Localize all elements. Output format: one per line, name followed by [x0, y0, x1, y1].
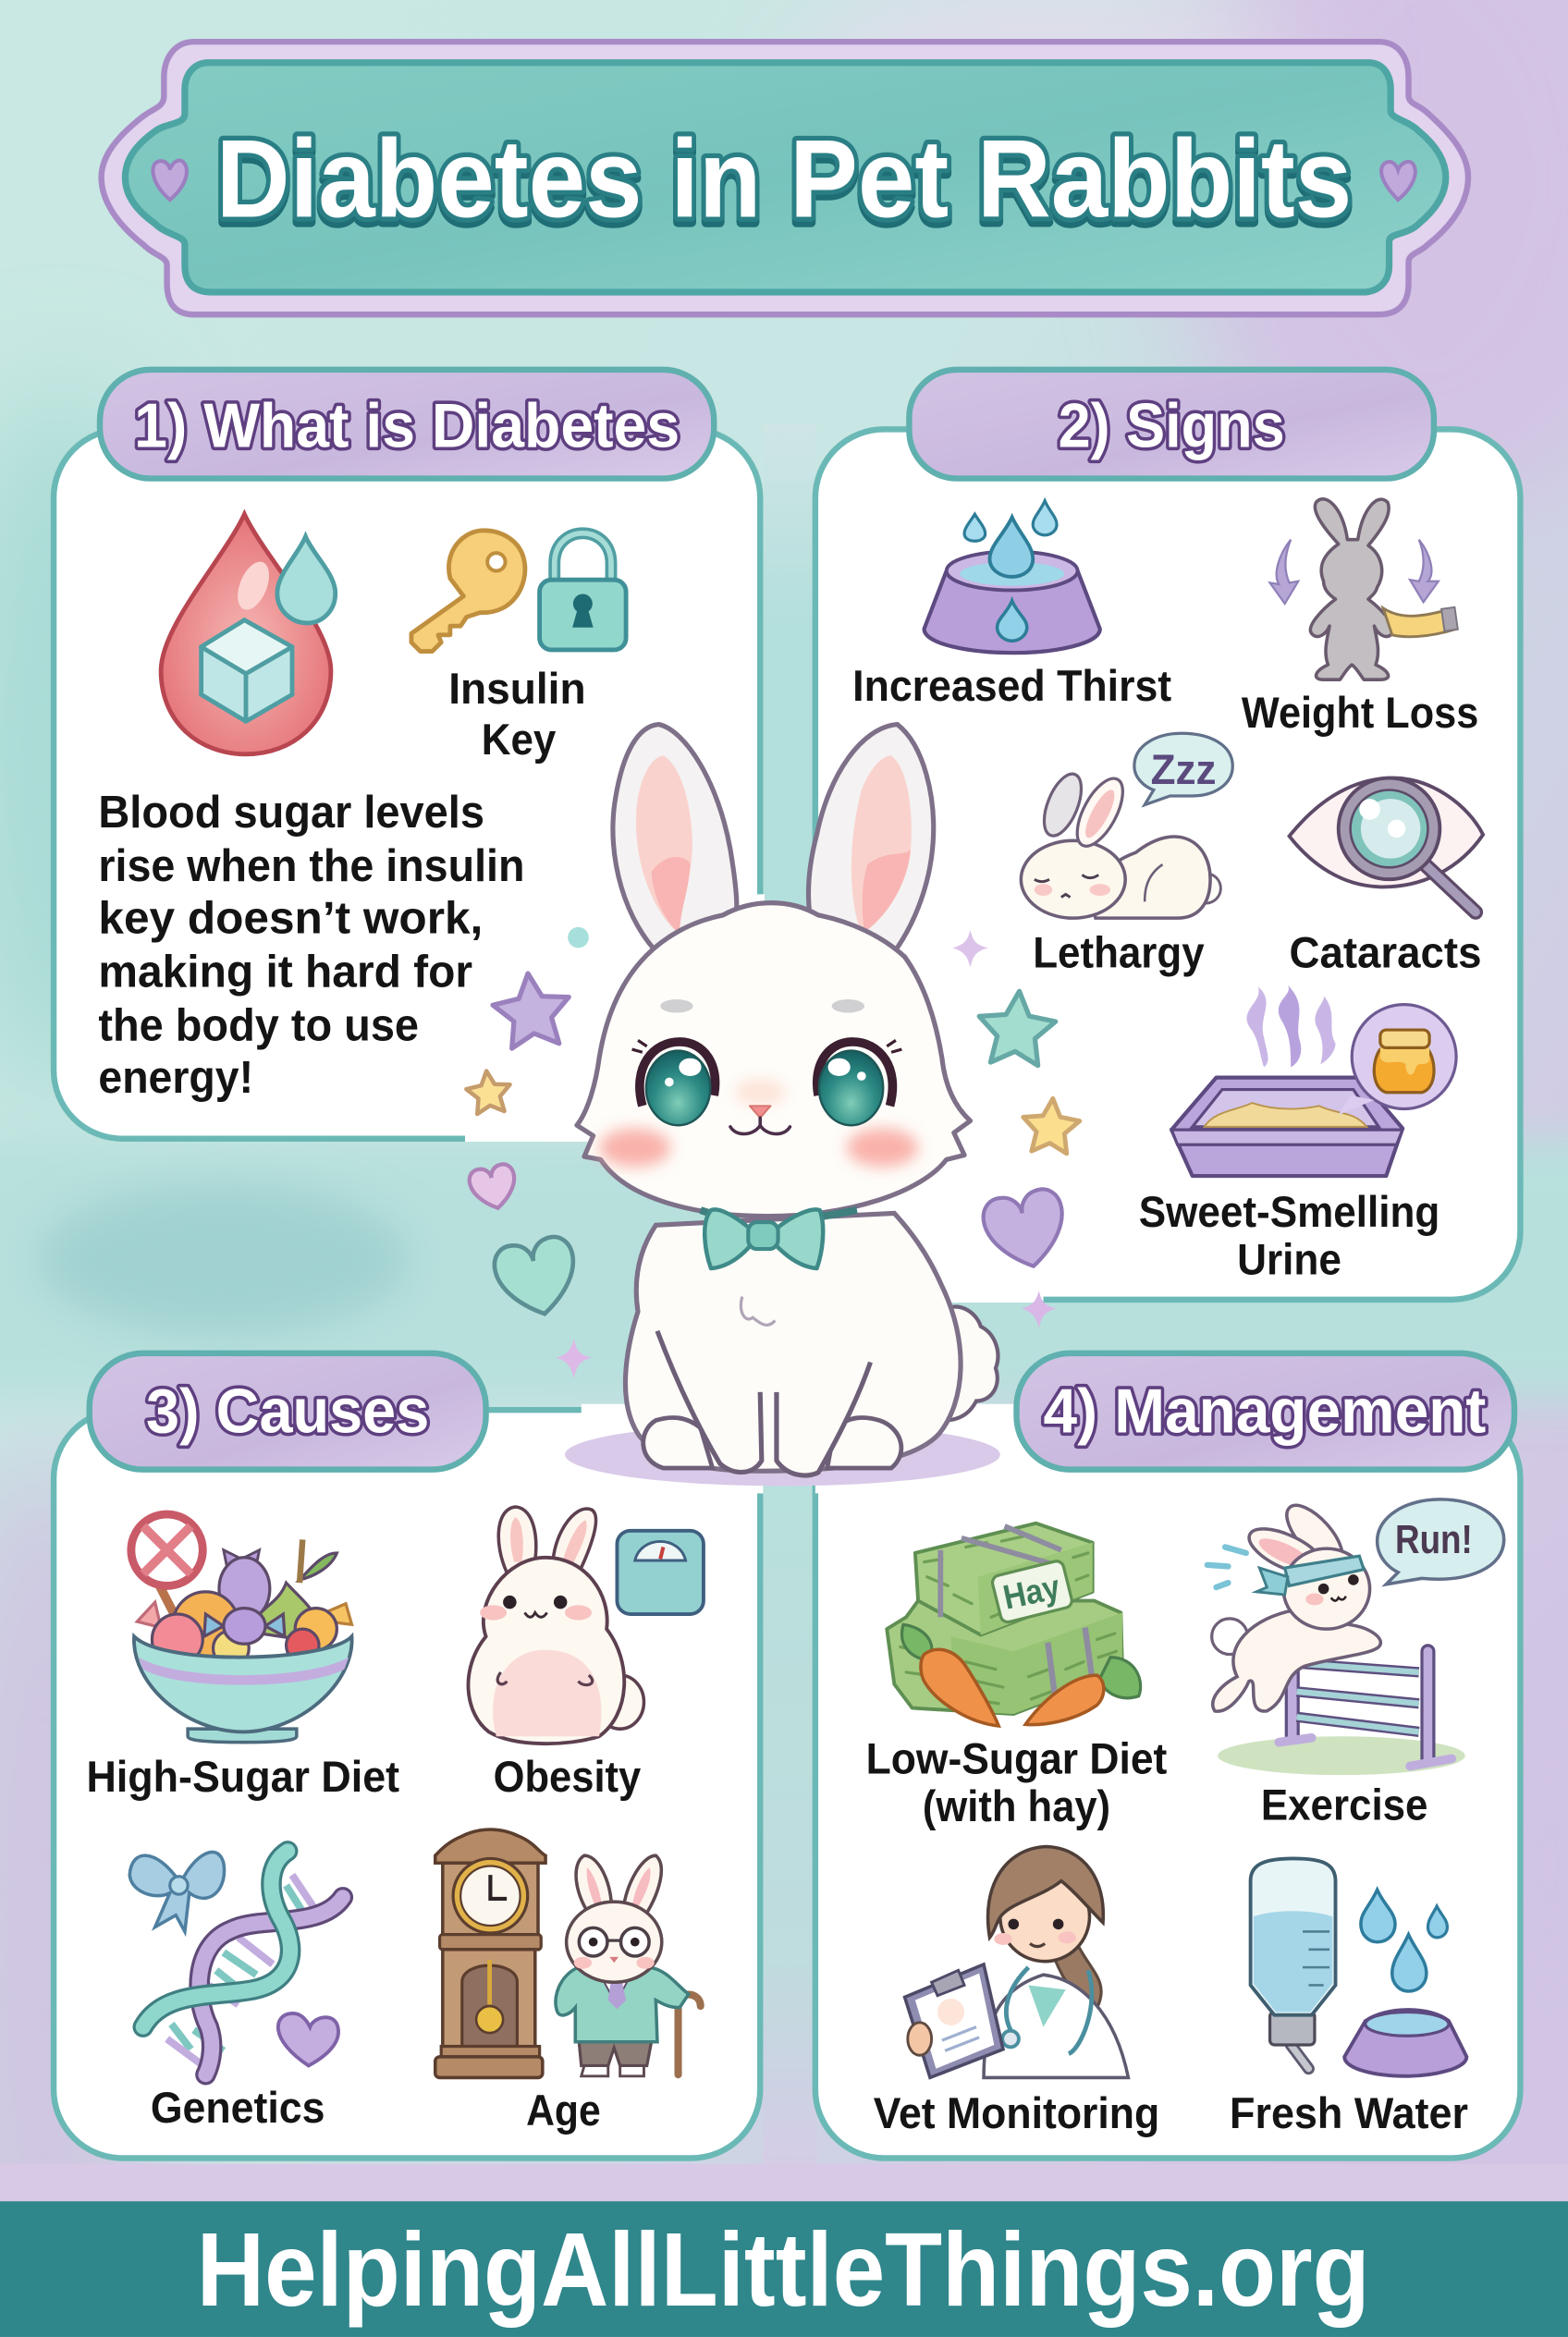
- icon: candy and fruit bowl: [131, 1514, 352, 1743]
- rabbit back feet: [643, 1417, 901, 1468]
- text: high-sugar diet: High-Sugar Diet: [87, 1753, 399, 1802]
- heading: management: [1016, 1353, 1514, 1470]
- text: exercise: Exercise: [1261, 1781, 1427, 1830]
- text: fresh water: Fresh Water: [1230, 2089, 1468, 2138]
- text: what is diabetes description: rise when the insulin: [98, 840, 524, 891]
- decoration: sparkle left: [556, 1339, 592, 1378]
- decoration: teal heart: [491, 1233, 583, 1322]
- heading: causes: 3) Causes: [146, 1377, 429, 1446]
- heading: signs: 2) Signs: [1059, 392, 1285, 461]
- text: insulin key label: [448, 665, 586, 765]
- text: lethargy: Lethargy: [1033, 928, 1205, 977]
- icon: litter box with honey: [1171, 985, 1456, 1176]
- text: obesity: Obesity: [494, 1753, 642, 1802]
- footer band: HelpingAllLittleThings.org: [197, 2211, 1370, 2328]
- panel edge softening: [465, 894, 1044, 1493]
- decoration: sparkle: [952, 930, 988, 967]
- text: what is diabetes description: the body to use: [98, 999, 419, 1050]
- icon: obese rabbit with scale: [468, 1507, 704, 1744]
- icon: water bottle and bowl: [1251, 1858, 1466, 2076]
- icon: hay bales and carrots: [887, 1523, 1141, 1726]
- text: sweet-smelling urine: [1139, 1188, 1439, 1284]
- decoration: sparkle right: [1021, 1291, 1057, 1328]
- decoration: purple heart: [980, 1186, 1072, 1275]
- heading: management: 4) Management: [1044, 1377, 1486, 1446]
- icon: sleeping rabbit: [1021, 733, 1232, 918]
- decoration: teal dot: [568, 927, 589, 948]
- icon: blood drop with sugar cube: [161, 514, 336, 754]
- icon: hay bales and carrots: Hay: [999, 1567, 1063, 1617]
- panel: management: [815, 1410, 1520, 2158]
- text: low-sugar diet: Low-Sugar Diet: [866, 1735, 1167, 1784]
- text: insulin key label: Insulin: [448, 665, 586, 714]
- heading: causes: [90, 1353, 486, 1470]
- text: what is diabetes description: key doesn’t work,: [98, 892, 483, 943]
- text: genetics: Genetics: [151, 2084, 325, 2133]
- text: weight loss: Weight Loss: [1242, 689, 1478, 738]
- speech text: Run!: Run!: [1395, 1518, 1473, 1562]
- decoration: teal star: [976, 988, 1058, 1067]
- rabbit right eye: [817, 1040, 901, 1125]
- rabbit blush: [599, 1079, 918, 1167]
- text: what is diabetes description: Blood sugar levels: [98, 787, 484, 838]
- icon: vet with clipboard: [905, 1847, 1128, 2077]
- heading: signs: [909, 370, 1434, 479]
- text: what is diabetes description: making it hard for: [98, 946, 472, 997]
- panel: causes: [54, 1410, 760, 2158]
- icon: banner heart right: [1381, 162, 1415, 200]
- decoration: pink heart: [467, 1162, 520, 1213]
- text: low-sugar diet: [866, 1735, 1167, 1831]
- text: what is diabetes description: [98, 787, 524, 1103]
- icon: banner heart left: [153, 161, 187, 200]
- text: sweet-smelling urine: Urine: [1237, 1235, 1341, 1284]
- icon: key and lock: [411, 531, 626, 652]
- title shadow and text: Diabetes in Pet Rabbits: [216, 123, 1352, 246]
- rabbit ground shadow: [565, 1424, 1000, 1486]
- text: low-sugar diet: (with hay): [923, 1782, 1110, 1831]
- rabbit tail: [936, 1307, 998, 1420]
- text: cataracts: Cataracts: [1290, 928, 1481, 977]
- text: insulin key label: Key: [482, 716, 557, 765]
- rabbit chest tuft: [741, 1297, 775, 1325]
- title shadow and text: Diabetes in Pet Rabbits: [216, 118, 1352, 241]
- rabbit head: [577, 903, 971, 1217]
- rabbit brows: [660, 999, 864, 1013]
- decoration: yellow star right: [1021, 1096, 1081, 1155]
- text: sweet-smelling urine: Sweet-Smelling: [1139, 1188, 1439, 1237]
- icon: dna helix with bow and heart: [129, 1851, 343, 2074]
- illustration: central rabbit: [565, 725, 1000, 1486]
- rabbit nose and mouth: [730, 1106, 790, 1134]
- panel: signs: [815, 429, 1520, 1300]
- speech text: Zzz: Zzz: [1151, 746, 1217, 793]
- text: what is diabetes description: energy!: [98, 1052, 253, 1103]
- heading: what is diabetes: [100, 370, 714, 479]
- rabbit left eye: [632, 1040, 716, 1125]
- title banner: [102, 42, 1468, 314]
- icon: grandfather clock: [435, 1829, 545, 2077]
- rabbit body: [625, 1213, 961, 1471]
- icon: rabbit jumping over hurdle: [1207, 1497, 1504, 1775]
- icon: water bowl with drops: [925, 501, 1100, 653]
- icon: weight loss rabbit: [1270, 499, 1458, 679]
- text: increased thirst: Increased Thirst: [852, 662, 1171, 711]
- heading: what is diabetes: 1) What is Diabetes: [134, 392, 680, 461]
- panel: what is diabetes: [54, 429, 760, 1139]
- icon: senior rabbit: [556, 1855, 701, 2076]
- decoration: purple star: [490, 970, 573, 1050]
- decoration: yellow star left: [465, 1069, 513, 1115]
- rabbit left ear: [613, 725, 737, 957]
- rabbit bow tie: [701, 1209, 857, 1268]
- text: age: Age: [526, 2086, 601, 2135]
- rabbit right ear: [808, 725, 934, 961]
- icon: eye with magnifier: [1290, 778, 1483, 912]
- rabbit front legs: [657, 1331, 871, 1475]
- text: vet monitoring: Vet Monitoring: [874, 2089, 1159, 2138]
